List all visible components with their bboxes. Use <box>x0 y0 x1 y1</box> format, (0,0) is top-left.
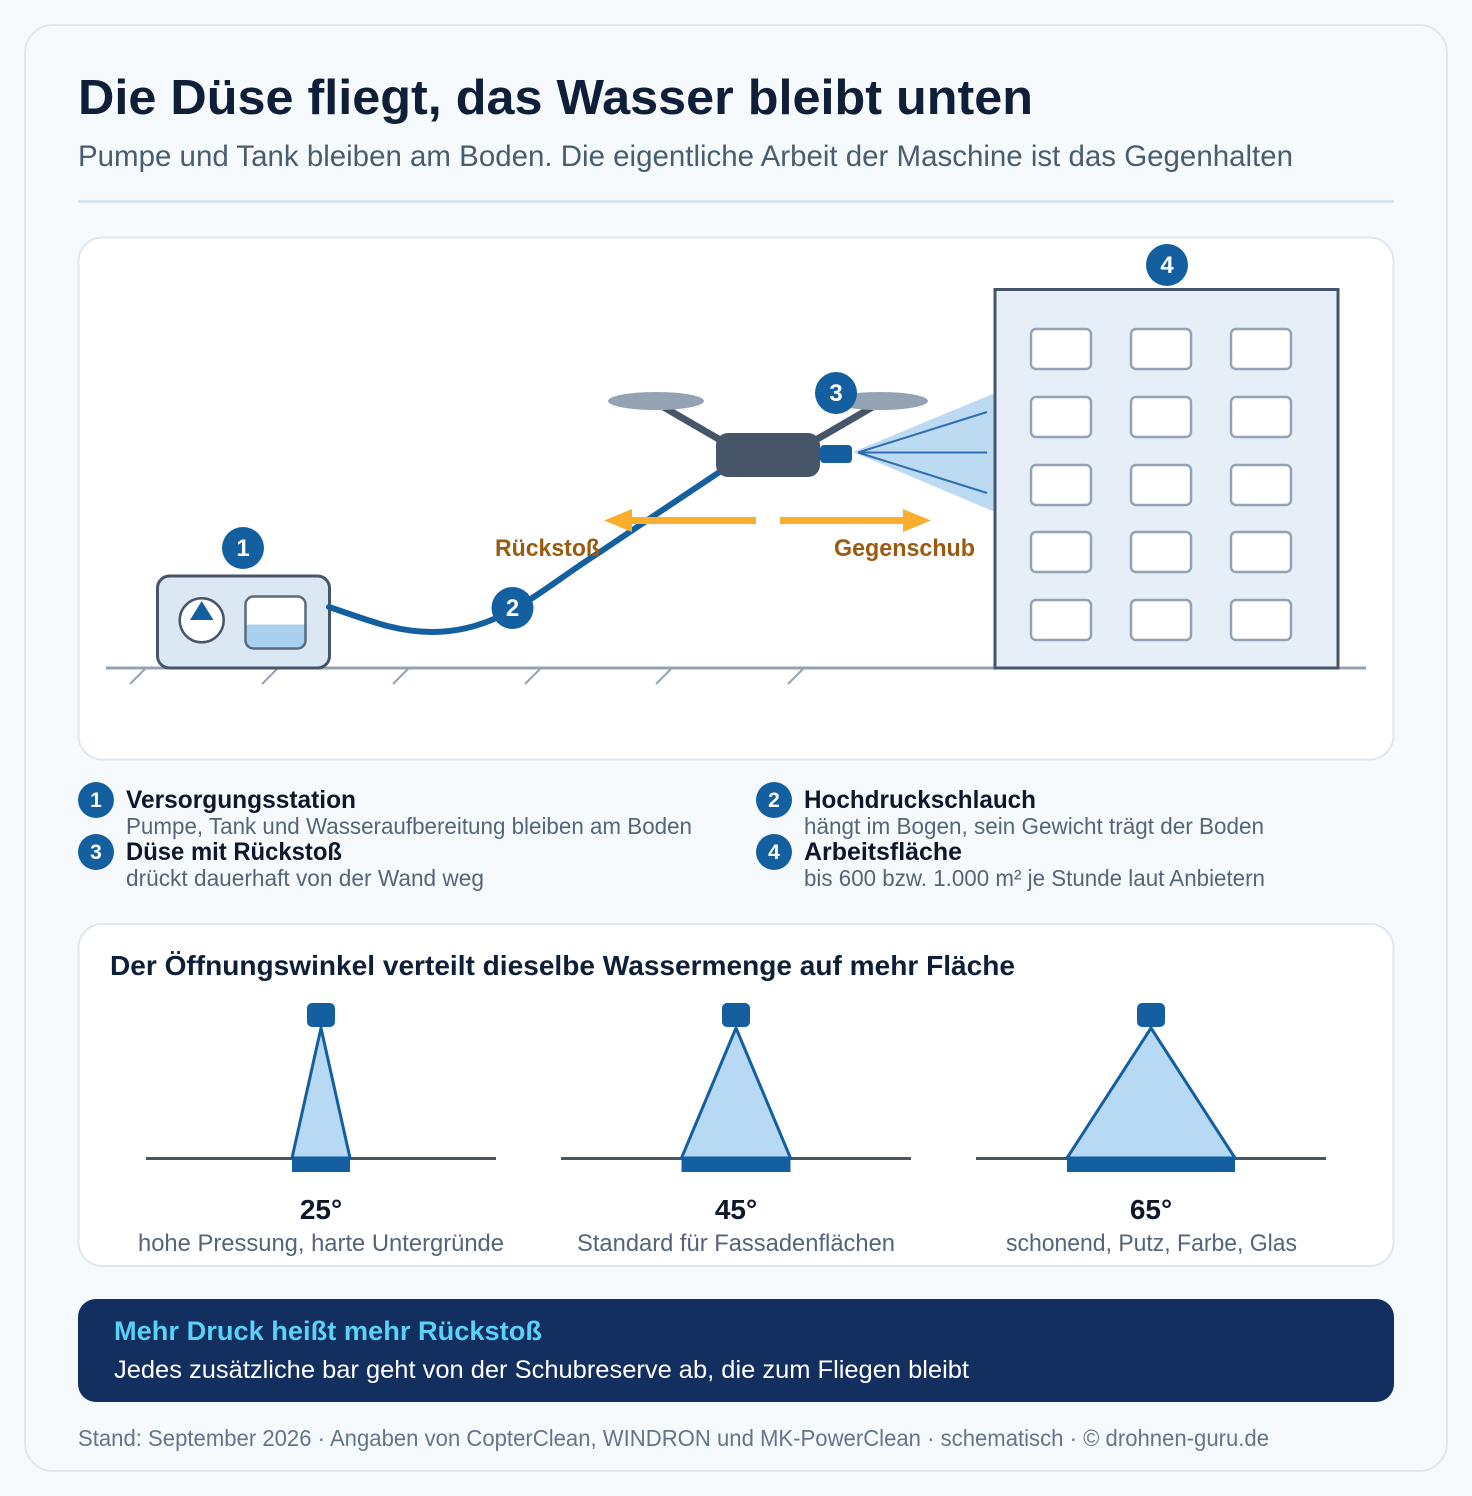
angle 25 <box>138 1003 504 1257</box>
legend item 2: Hochdruckschlauch <box>804 786 1036 814</box>
legend item 4: 4 <box>768 841 780 864</box>
legend item 2: hängt im Bogen, sein Gewicht trägt der Boden <box>804 813 1264 839</box>
label: Rückstoß: Rückstoß <box>495 535 600 562</box>
angle 65: schonend, Putz, Farbe, Glas <box>1006 1230 1297 1257</box>
legend item 2: 2 <box>768 789 780 812</box>
angle 65: 65° <box>1130 1194 1172 1225</box>
angle 25: hohe Pressung, harte Untergründe <box>138 1230 504 1257</box>
badge 2 <box>492 587 534 629</box>
angle 65 <box>976 1003 1326 1257</box>
angle 45: 45° <box>715 1194 757 1225</box>
nozzle <box>820 445 852 463</box>
hose <box>329 469 724 632</box>
legend item 4: bis 600 bzw. 1.000 m² je Stunde laut Anbietern <box>804 865 1265 891</box>
badge 4 <box>1146 244 1188 286</box>
angle 45 <box>561 1003 911 1257</box>
footer source line: Stand: September 2026 · Angaben von CopterClean, WINDRON und MK-PowerClean · schematisch · © drohnen-guru.de <box>78 1425 1269 1451</box>
callout: Mehr Druck heißt mehr Rückstoß <box>114 1316 542 1346</box>
legend item 1: 1 <box>90 789 102 812</box>
badge 3 <box>815 372 857 414</box>
building <box>995 290 1338 668</box>
legend item 3: 3 <box>90 841 102 864</box>
legend item 1 <box>78 782 692 839</box>
icon: pump <box>180 598 224 642</box>
label: Gegenschub: Gegenschub <box>834 535 975 562</box>
panel heading: Der Öffnungswinkel verteilt dieselbe Wassermenge auf mehr Fläche <box>110 950 1015 981</box>
arrow: recoil <box>604 509 756 532</box>
callout: Jedes zusätzliche bar geht von der Schubreserve ab, die zum Fliegen bleibt <box>114 1356 969 1384</box>
legend item 4 <box>756 834 1265 891</box>
building windows <box>1031 329 1291 640</box>
angle 45: Standard für Fassadenflächen <box>577 1230 895 1257</box>
legend item 1: Pumpe, Tank und Wasseraufbereitung bleiben am Boden <box>126 813 692 839</box>
spray fan <box>853 393 995 512</box>
legend item 3 <box>78 834 484 891</box>
legend item 1: Versorgungsstation <box>126 786 356 814</box>
title: Die Düse fliegt, das Wasser bleibt unten <box>78 71 1033 125</box>
badge 1 <box>222 527 264 569</box>
icon: water tank <box>246 596 306 648</box>
callout <box>78 1299 1394 1402</box>
ground line with hatching <box>106 668 1366 684</box>
arrow: counter-thrust <box>780 509 931 532</box>
badge 1: 1 <box>236 535 250 562</box>
badge 3: 3 <box>829 380 843 407</box>
legend item 3: Düse mit Rückstoß <box>126 838 342 866</box>
supply station <box>158 576 330 668</box>
panel: schematic diagram <box>78 238 1394 760</box>
angle 25: 25° <box>300 1194 342 1225</box>
legend item 3: drückt dauerhaft von der Wand weg <box>126 865 484 891</box>
legend item 4: Arbeitsfläche <box>804 838 962 866</box>
drone <box>608 392 928 477</box>
badge 2: 2 <box>506 595 519 622</box>
badge 4: 4 <box>1160 252 1174 279</box>
subtitle: Pumpe und Tank bleiben am Boden. Die eigentliche Arbeit der Maschine ist das Gegenhalten <box>78 140 1293 173</box>
panel: spray angles <box>78 924 1394 1266</box>
legend item 2 <box>756 782 1264 839</box>
